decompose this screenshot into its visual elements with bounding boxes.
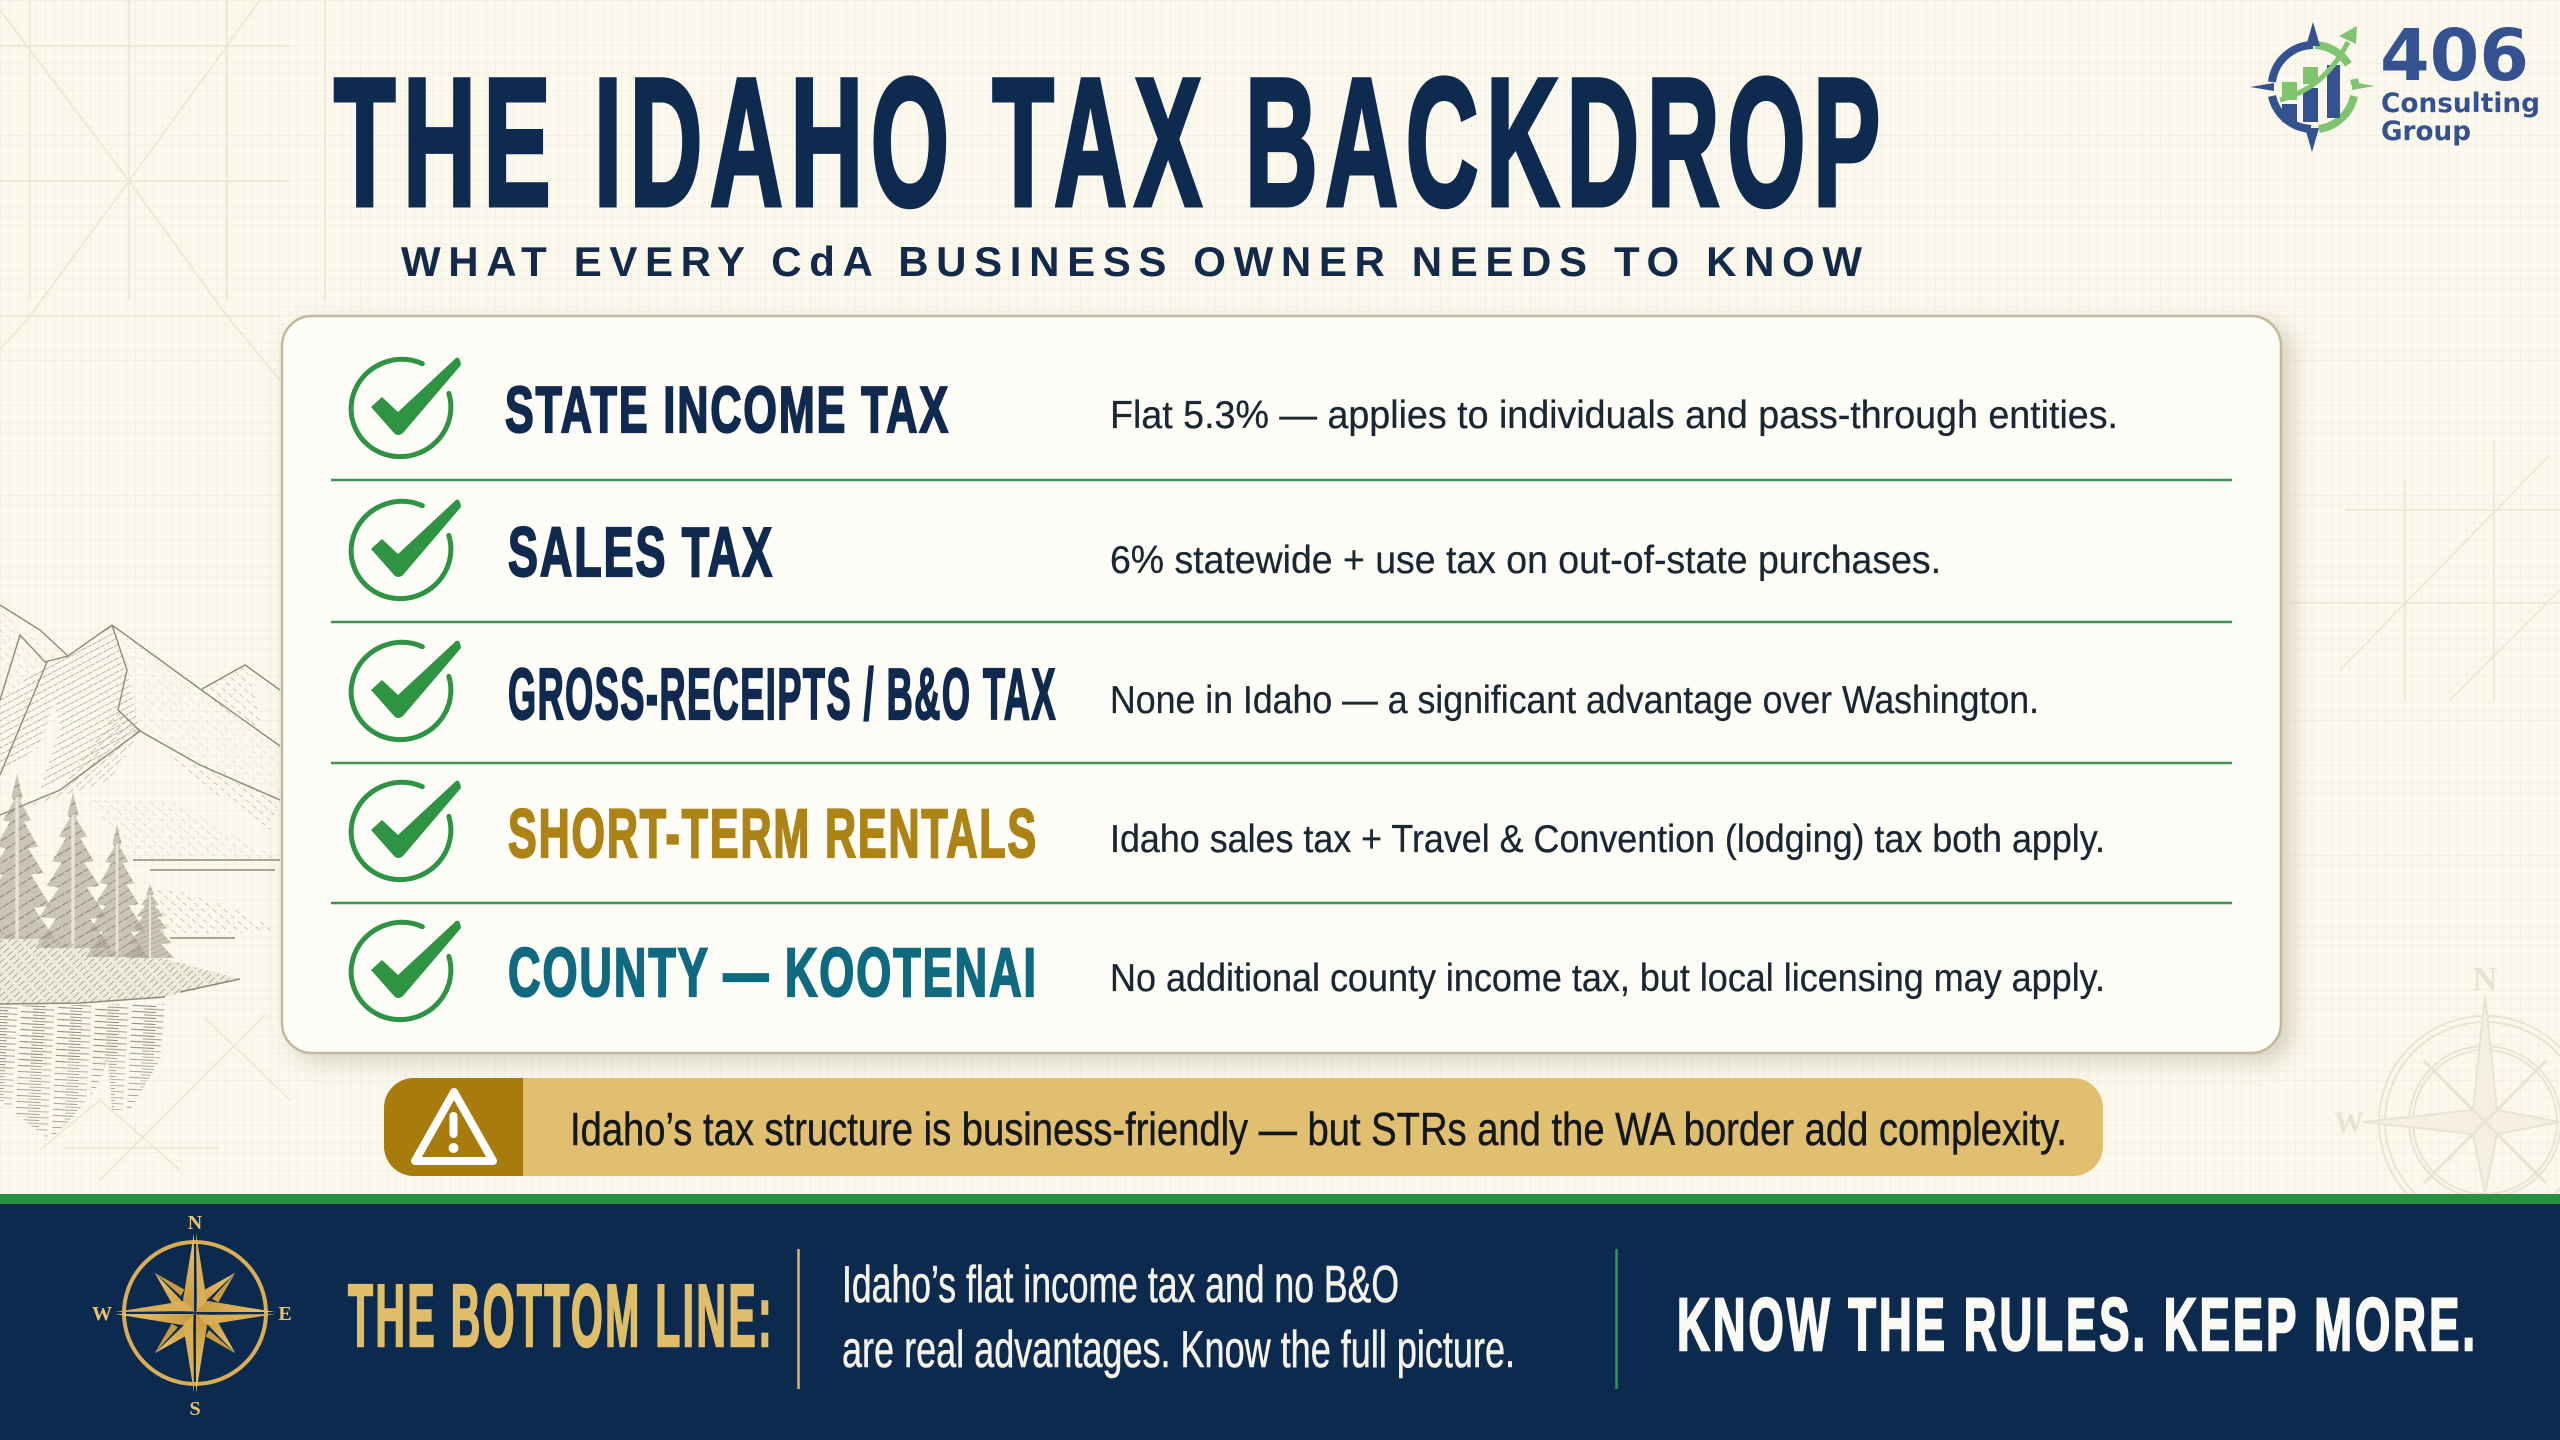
footer message: are real advantages. Know the full picture. xyxy=(842,1321,1515,1379)
icon: gold compass rose: W xyxy=(92,1303,112,1325)
icon: warning triangle xyxy=(415,1092,493,1161)
icon: gold compass rose: E xyxy=(278,1303,292,1325)
illustration: faint compass watermark xyxy=(2334,961,2560,1228)
row: state income tax xyxy=(339,347,2118,469)
row: gross receipts: None in Idaho — a significant advantage over Washington. xyxy=(1110,679,2039,722)
logo: 406 Consulting Group xyxy=(2250,14,2540,152)
subtitle: WHAT EVERY CdA BUSINESS OWNER NEEDS TO KNOW xyxy=(401,238,1862,285)
callout: warning banner xyxy=(384,1078,2103,1176)
row: sales tax: 6% statewide + use tax on out-of-state purchases. xyxy=(1110,539,1941,582)
banner text: Idaho’s tax structure is business-friendly — but STRs and the WA border add complexity. xyxy=(570,1103,2067,1155)
footer band xyxy=(0,1194,2560,1440)
footer message: Idaho’s flat income tax and no B&O xyxy=(842,1256,1399,1314)
icon: gold compass rose xyxy=(92,1212,292,1420)
logo emblem xyxy=(2250,22,2375,152)
row: state income tax: STATE INCOME TAX xyxy=(505,373,950,446)
illustration: mountain and lake sketch xyxy=(0,605,280,1140)
illustration: faint compass watermark: N xyxy=(2473,961,2498,998)
illustration: faint compass watermark: W xyxy=(2334,1106,2364,1139)
row: county kootenai: No additional county income tax, but local licensing may apply. xyxy=(1110,957,2105,1000)
row: sales tax xyxy=(339,489,1941,611)
row: gross receipts: GROSS-RECEIPTS / B&O TAX xyxy=(508,655,1057,735)
row: state income tax: Flat 5.3% — applies to individuals and pass-through entities. xyxy=(1110,394,2118,437)
logo wordmark: 406 xyxy=(2380,14,2529,97)
icon: gold compass rose: N xyxy=(188,1212,203,1234)
row: short-term rentals: Idaho sales tax + Travel & Convention (lodging) tax both apply. xyxy=(1110,818,2105,861)
row: county kootenai xyxy=(339,910,2105,1032)
footer message xyxy=(842,1256,1515,1379)
row: short-term rentals xyxy=(339,770,2105,892)
row: gross receipts xyxy=(339,630,2039,752)
icon: gold compass rose: S xyxy=(189,1398,201,1420)
row: sales tax: SALES TAX xyxy=(508,513,774,591)
logo: 406 Consulting Group: Group xyxy=(2381,116,2471,147)
footer band: THE BOTTOM LINE: xyxy=(348,1266,774,1365)
row: short-term rentals: SHORT-TERM RENTALS xyxy=(508,795,1038,872)
panel: tax checklist card xyxy=(282,316,2281,1053)
logo: 406 Consulting Group: Consulting xyxy=(2381,88,2540,119)
row: county kootenai: COUNTY — KOOTENAI xyxy=(508,934,1038,1011)
